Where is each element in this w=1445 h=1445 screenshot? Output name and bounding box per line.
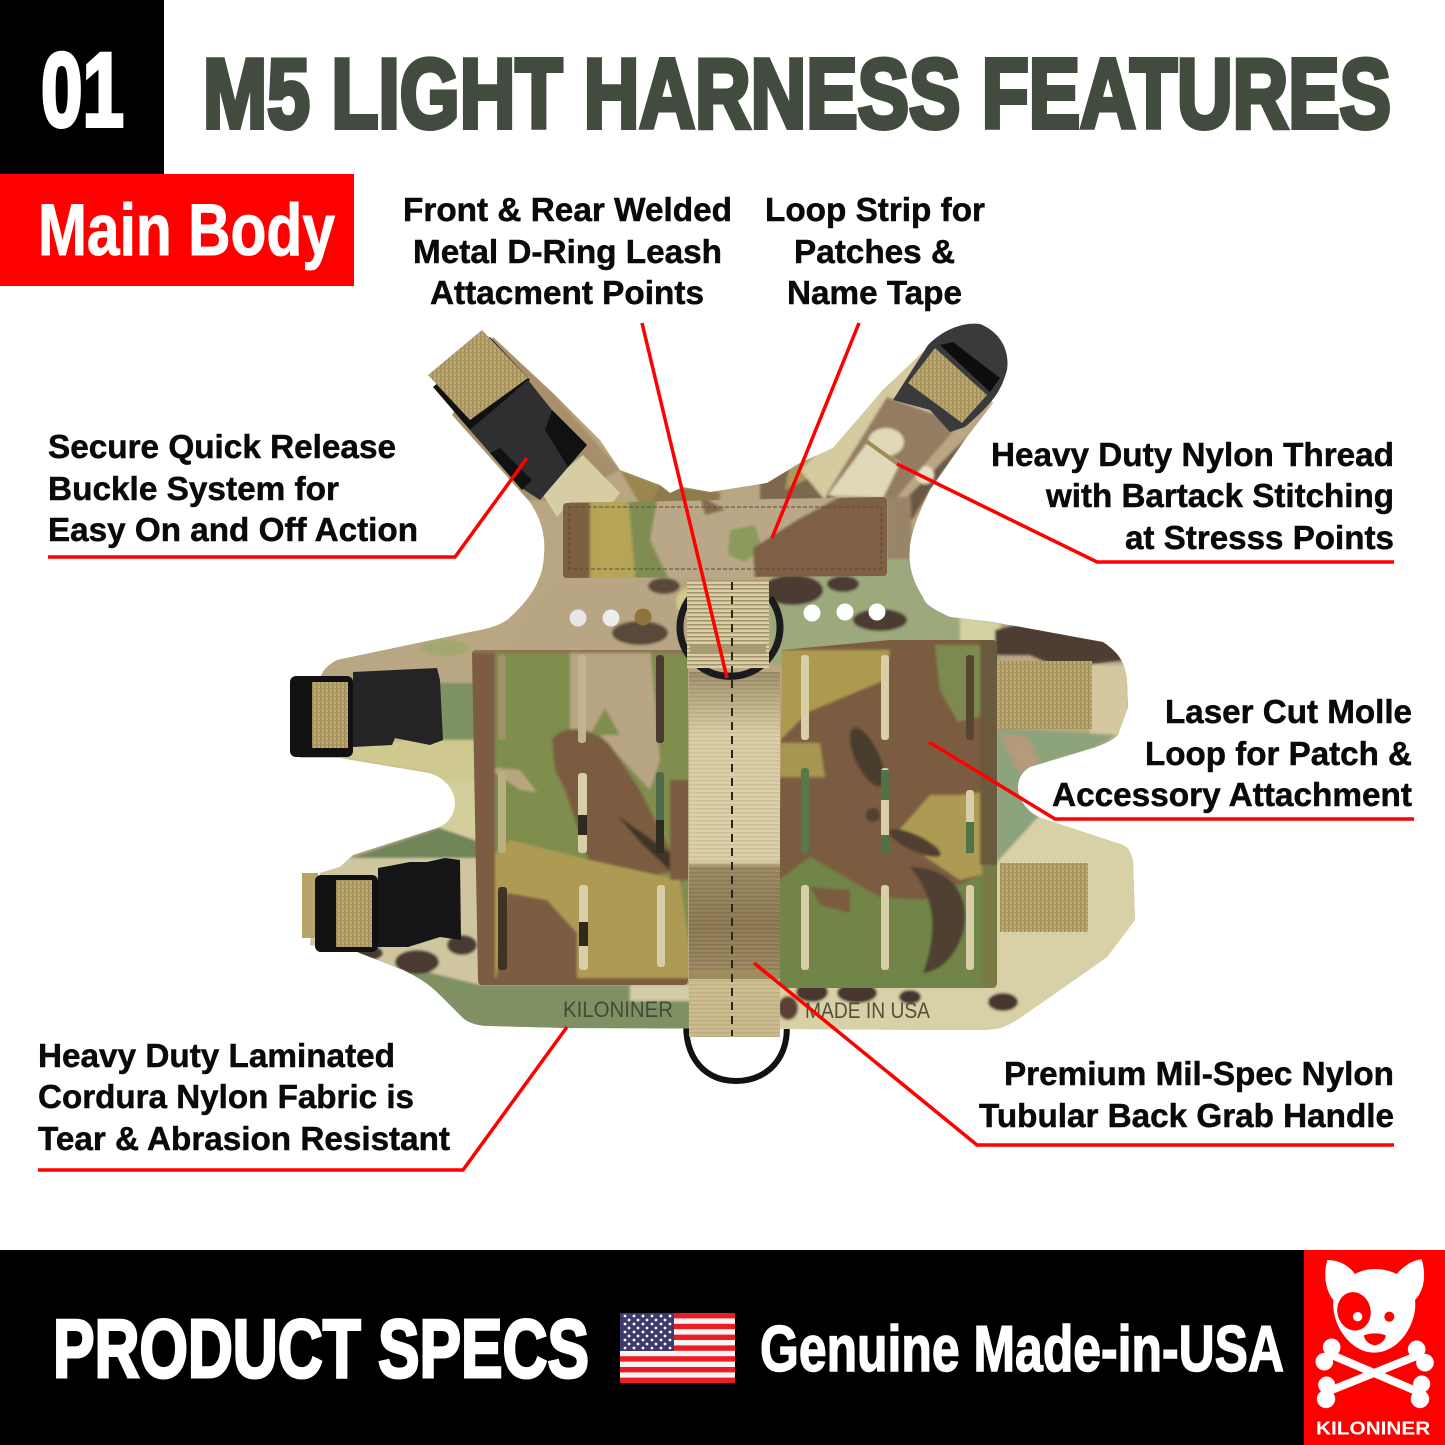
callout: laser cut molle: Accessory Attachment (1052, 777, 1412, 814)
bartack stitching on right arm (830, 441, 898, 505)
callout: grab handle (979, 1056, 1394, 1135)
callout: cordura fabric (38, 1038, 450, 1158)
callout: cordura fabric: Cordura Nylon Fabric is (38, 1079, 414, 1116)
holes row (570, 604, 886, 626)
callout: loop strip: Name Tape (787, 275, 962, 312)
buckle: left upper flap (290, 668, 443, 757)
strap end and buckle tip: upper right arm (893, 324, 1008, 432)
header block: number 01: 01 (41, 32, 124, 149)
right side webbing tabs (998, 661, 1092, 932)
callout: bartack stitching: Heavy Duty Nylon Thread (991, 437, 1394, 474)
quick release buckle: upper left arm (428, 330, 587, 500)
right molle panel (780, 640, 997, 988)
back grab handle webbing (689, 672, 780, 1037)
callout: D-ring leash points (403, 192, 732, 312)
left molle panel (465, 645, 695, 990)
lower metal D-ring (686, 1010, 787, 1081)
callout: bartack stitching (991, 437, 1394, 557)
printed fabric text: MADE IN USA: MADE IN USA (805, 998, 930, 1023)
callout: bartack stitching: at Stresss Points (1125, 520, 1394, 557)
callout: D-ring leash points: Front & Rear Welded (403, 192, 732, 229)
callout: laser cut molle: Loop for Patch & (1145, 736, 1412, 773)
logo: dog head (1325, 1259, 1424, 1353)
strap under left buckle (540, 455, 620, 517)
callout: grab handle: Tubular Back Grab Handle (979, 1098, 1394, 1135)
icon: USA flag (620, 1313, 735, 1383)
callout: quick release buckle: Buckle System for (48, 471, 339, 508)
callout: laser cut molle (1052, 694, 1412, 814)
harness base fabric with camouflage (280, 320, 1150, 1040)
callout: laser cut molle: Laser Cut Molle (1165, 694, 1412, 731)
harness product illustration (280, 320, 1150, 1081)
callout: loop strip: Loop Strip for (765, 192, 985, 229)
callout: quick release buckle (48, 429, 418, 549)
callout: bartack stitching: with Bartack Stitching (1045, 478, 1394, 515)
section label: Main Body (0, 174, 354, 286)
logo: crossbones (1316, 1339, 1434, 1408)
callout: loop strip: Patches & (794, 234, 955, 271)
footer heading: PRODUCT SPECS: PRODUCT SPECS (53, 1302, 589, 1395)
Kiloniner logo (1304, 1250, 1445, 1445)
buckle: left lower flap (302, 858, 461, 952)
logo: eye patch and eyes (1334, 1289, 1394, 1345)
section label: Main Body: Main Body (38, 190, 335, 271)
callout: quick release buckle: Secure Quick Release (48, 429, 396, 466)
footer tagline: Genuine Made-in-USA (760, 1312, 1284, 1385)
callout leader lines (38, 323, 1414, 1170)
molle laser cut slits (498, 655, 974, 970)
upper webbing through D-ring (687, 580, 769, 1036)
header block: number 01 (0, 0, 164, 174)
callout: quick release buckle: Easy On and Off Action (48, 512, 418, 549)
velcro loop strip (563, 497, 887, 578)
callout: grab handle: Premium Mil-Spec Nylon (1004, 1056, 1394, 1093)
logo: wordmark: KILONINER (1316, 1417, 1431, 1438)
printed fabric text: KILONINER: KILONINER (563, 997, 673, 1022)
callout: cordura fabric: Heavy Duty Laminated (38, 1038, 395, 1075)
callout: loop strip (765, 192, 985, 312)
upper metal D-ring (680, 598, 780, 676)
callout: cordura fabric: Tear & Abrasion Resistant (38, 1121, 450, 1158)
footer bar (0, 1250, 1445, 1445)
callout: D-ring leash points: Attacment Points (430, 275, 704, 312)
callout: D-ring leash points: Metal D-Ring Leash (413, 234, 722, 271)
